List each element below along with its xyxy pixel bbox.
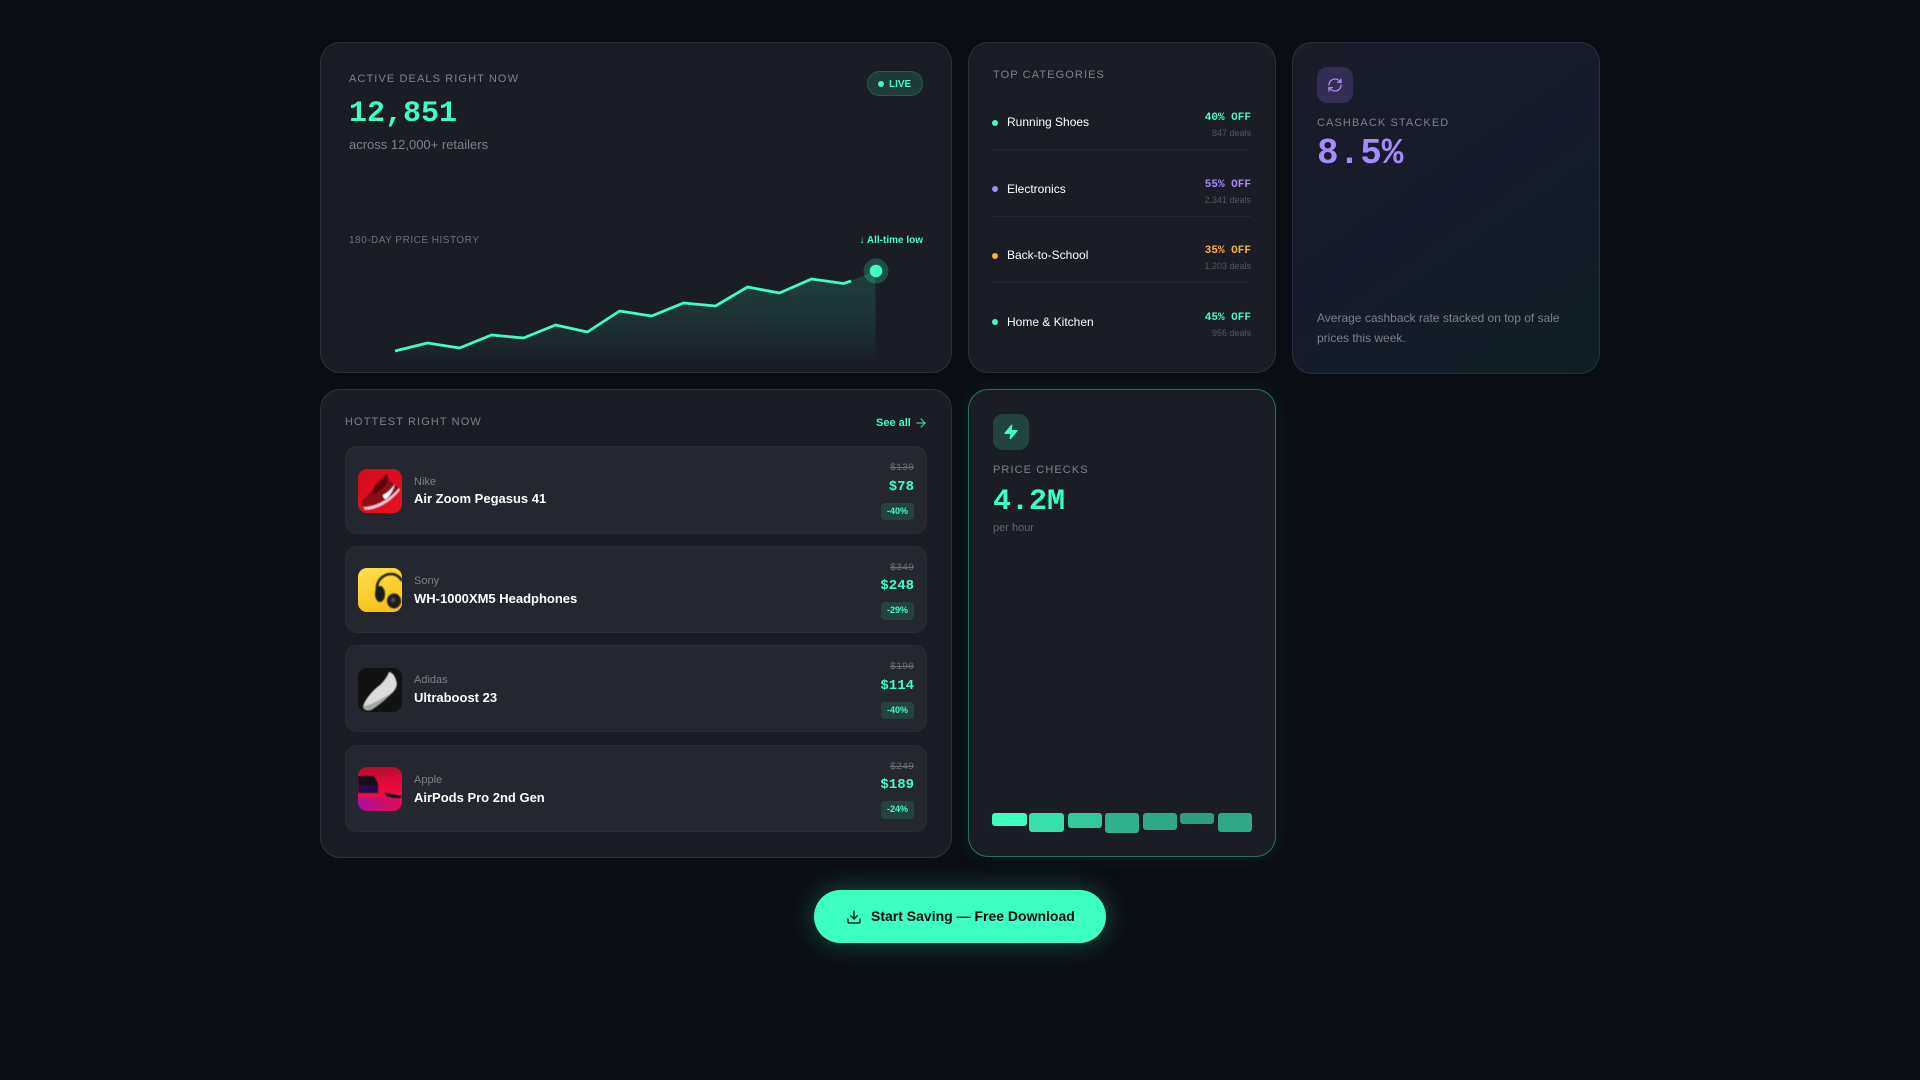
- product name: WH-1000XM5 Headphones: [414, 591, 577, 606]
- product name: Ultraboost 23: [414, 690, 497, 705]
- discount badge: -24%: [887, 804, 908, 814]
- old price: $249: [890, 762, 914, 773]
- category: electronics: 2,341 deals: [1204, 195, 1251, 205]
- hottest heading: HOTTEST RIGHT NOW: [345, 416, 482, 428]
- category: home and kitchen: 956 deals: [1212, 328, 1251, 338]
- category: running shoes: Running Shoes: [1007, 115, 1089, 129]
- call-to-action button: [814, 890, 1106, 943]
- active deals count: 12,851: [349, 97, 457, 131]
- per hour note: per hour: [993, 522, 1034, 534]
- discount badge: [881, 801, 914, 819]
- brand: Apple: [414, 774, 442, 786]
- discount badge: -40%: [887, 506, 908, 516]
- line chart: price history: [394, 258, 888, 352]
- category: back to school: Back-to-School: [1007, 248, 1088, 262]
- category: home and kitchen: [992, 312, 1251, 338]
- all-time low note: ↓ All-time low: [859, 235, 923, 246]
- product image: red running shoe: [358, 469, 402, 513]
- panel: price checks: [968, 389, 1276, 857]
- panel: active deals: [320, 42, 952, 373]
- product name: Air Zoom Pegasus 41: [414, 491, 546, 506]
- live text: LIVE: [889, 79, 911, 90]
- category: electronics: [992, 179, 1251, 205]
- discount badge: [881, 503, 914, 520]
- cashback description: Average cashback rate stacked on top of sale: [1317, 311, 1560, 325]
- icon: lightning bolt: [993, 414, 1029, 450]
- category: back to school: [992, 245, 1251, 271]
- button text: Start Saving — Free Download: [871, 908, 1075, 924]
- price history label: 180-DAY PRICE HISTORY: [349, 235, 479, 246]
- icon: download: [847, 910, 861, 924]
- panel: hottest right now: [320, 389, 952, 858]
- sale price: $248: [880, 578, 914, 594]
- product image: yellow headphones: [358, 568, 402, 612]
- sale price: $189: [880, 777, 914, 793]
- top categories heading: TOP CATEGORIES: [993, 69, 1105, 81]
- sale price: $78: [889, 479, 914, 495]
- product name: AirPods Pro 2nd Gen: [414, 790, 545, 805]
- category: running shoes: 40% OFF: [1205, 112, 1251, 124]
- old price: $349: [890, 563, 914, 574]
- price checks label: PRICE CHECKS: [993, 464, 1089, 476]
- see all link: See all: [876, 417, 911, 429]
- discount badge: [881, 602, 914, 620]
- category: back to school: 1,203 deals: [1204, 261, 1251, 271]
- category: home and kitchen: 45% OFF: [1205, 312, 1251, 324]
- discount badge: [881, 702, 914, 719]
- live badge: [867, 71, 923, 96]
- discount badge: -29%: [887, 605, 908, 615]
- category: electronics: 55% OFF: [1205, 179, 1251, 191]
- category: home and kitchen: Home & Kitchen: [1007, 315, 1094, 329]
- sale price: $114: [880, 678, 914, 694]
- cashback label: CASHBACK STACKED: [1317, 117, 1449, 129]
- old price: $130: [890, 463, 914, 474]
- active deals label: ACTIVE DEALS RIGHT NOW: [349, 73, 519, 85]
- category: back to school: 35% OFF: [1205, 245, 1251, 257]
- category: electronics: Electronics: [1007, 182, 1066, 196]
- deal row: sony: [345, 546, 927, 633]
- price checks value: 4.2M: [993, 484, 1065, 518]
- brand: Nike: [414, 476, 436, 488]
- live indicator dot: [878, 81, 884, 87]
- retailers subtitle: across 12,000+ retailers: [349, 137, 488, 152]
- bar chart: price check activity: [992, 813, 1252, 833]
- deal row: apple: [345, 745, 927, 832]
- deal row: adidas: [345, 645, 927, 732]
- cashback description: [1317, 311, 1560, 345]
- cashback value: 8.5%: [1317, 133, 1403, 174]
- panel: cashback stacked: [1292, 42, 1600, 374]
- discount badge: -40%: [887, 705, 908, 715]
- old price: $190: [890, 662, 914, 673]
- category: running shoes: 847 deals: [1212, 128, 1251, 138]
- product image: earbuds on red: [358, 767, 402, 811]
- deal row: nike: [345, 446, 927, 534]
- brand: Adidas: [414, 674, 448, 686]
- product image: white sneaker: [358, 668, 402, 712]
- see all link: [876, 417, 926, 429]
- panel: top categories: [968, 42, 1276, 373]
- cashback description: prices this week.: [1317, 331, 1406, 345]
- brand: Sony: [414, 575, 439, 587]
- icon: refresh: [1317, 67, 1353, 103]
- category: running shoes: [992, 112, 1251, 138]
